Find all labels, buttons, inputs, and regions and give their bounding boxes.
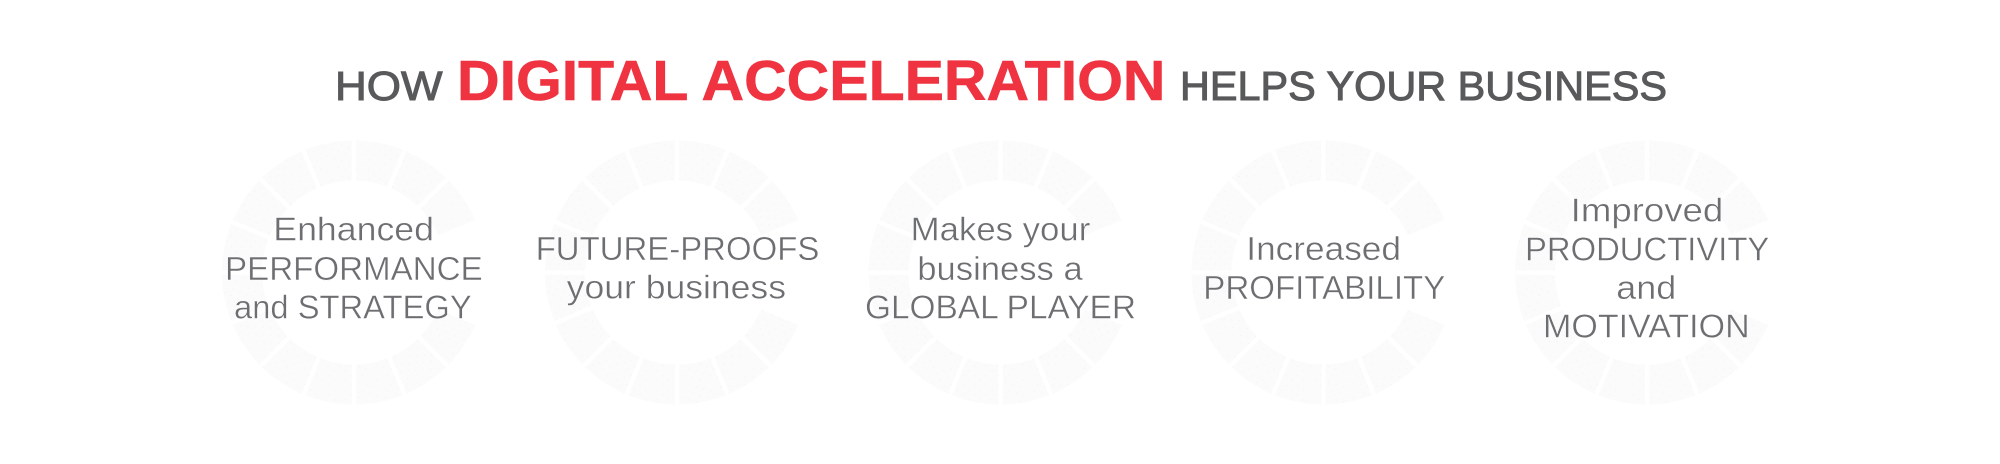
label 1: PERFORMANCE bbox=[225, 251, 483, 288]
panel: enhanced performance and strategy bbox=[214, 132, 483, 413]
label 4: PROFITABILITY bbox=[1203, 270, 1445, 307]
label 3: business a bbox=[917, 251, 1083, 288]
label 1 bbox=[225, 212, 483, 326]
label 2: FUTURE-PROOFS bbox=[536, 231, 819, 268]
ring icon 1 bbox=[214, 132, 482, 413]
label 5: MOTIVATION bbox=[1543, 308, 1750, 345]
title bbox=[335, 49, 1667, 113]
label 5: PRODUCTIVITY bbox=[1525, 232, 1769, 269]
ring icon 5 bbox=[1507, 132, 1775, 413]
title: HELPS YOUR BUSINESS bbox=[1180, 63, 1667, 109]
title: DIGITAL ACCELERATION bbox=[457, 49, 1166, 113]
label 2: your business bbox=[567, 269, 786, 306]
label 1: Enhanced bbox=[273, 212, 434, 249]
label 2 bbox=[536, 231, 819, 306]
label 4 bbox=[1203, 231, 1445, 307]
label 1: and STRATEGY bbox=[234, 289, 472, 326]
ring icon 3 bbox=[860, 132, 1128, 413]
title: HOW bbox=[335, 63, 443, 109]
label 3: Makes your bbox=[911, 212, 1090, 249]
label 5: Improved bbox=[1571, 193, 1723, 230]
label 3: GLOBAL PLAYER bbox=[865, 289, 1136, 326]
label 5: and bbox=[1616, 270, 1676, 307]
ring icon 2 bbox=[537, 132, 805, 413]
panel: increased profitability bbox=[1183, 132, 1451, 413]
panel: makes your business a global player bbox=[860, 132, 1136, 413]
label 3 bbox=[865, 212, 1136, 326]
ring icon 4 bbox=[1183, 132, 1451, 413]
panel: improved productivity and motivation bbox=[1507, 132, 1775, 413]
panel: future-proofs your business bbox=[536, 132, 819, 413]
label 5 bbox=[1525, 193, 1769, 345]
label 4: Increased bbox=[1246, 231, 1401, 268]
